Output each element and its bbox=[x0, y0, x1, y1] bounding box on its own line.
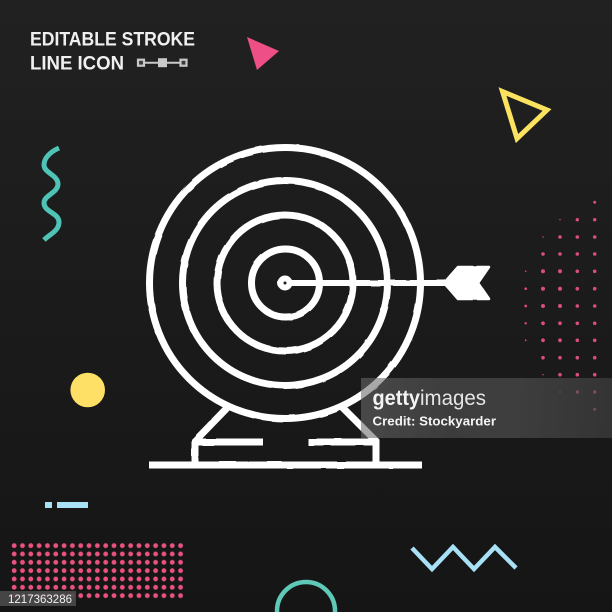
heading: editable stroke line icon: EDITABLE STROKE bbox=[30, 30, 195, 50]
target rings bbox=[150, 148, 420, 418]
teal semicircle bbox=[277, 582, 335, 612]
heading: editable stroke line icon: LINE ICON bbox=[30, 54, 124, 74]
getty images watermark: Credit: Stockyarder bbox=[372, 414, 496, 428]
image id label: 1217363286 bbox=[8, 592, 72, 606]
teal squiggle bbox=[44, 148, 59, 240]
getty images watermark: getty bbox=[372, 386, 420, 410]
target stand bbox=[149, 408, 422, 465]
yellow outlined triangle bbox=[502, 92, 547, 138]
getty images watermark bbox=[361, 378, 612, 438]
getty images watermark: images bbox=[420, 386, 486, 410]
pink halftone dots bbox=[524, 201, 596, 411]
pink triangle bbox=[247, 37, 279, 70]
blue dash bbox=[45, 502, 88, 508]
icon: vector path nodes bbox=[138, 58, 186, 67]
arrow bbox=[291, 267, 489, 299]
heading: editable stroke line icon bbox=[30, 30, 195, 74]
target icon with arrow bbox=[149, 148, 489, 465]
blue zigzag bbox=[412, 547, 516, 569]
yellow circle bbox=[70, 373, 105, 407]
pink dot grid bbox=[10, 542, 185, 600]
